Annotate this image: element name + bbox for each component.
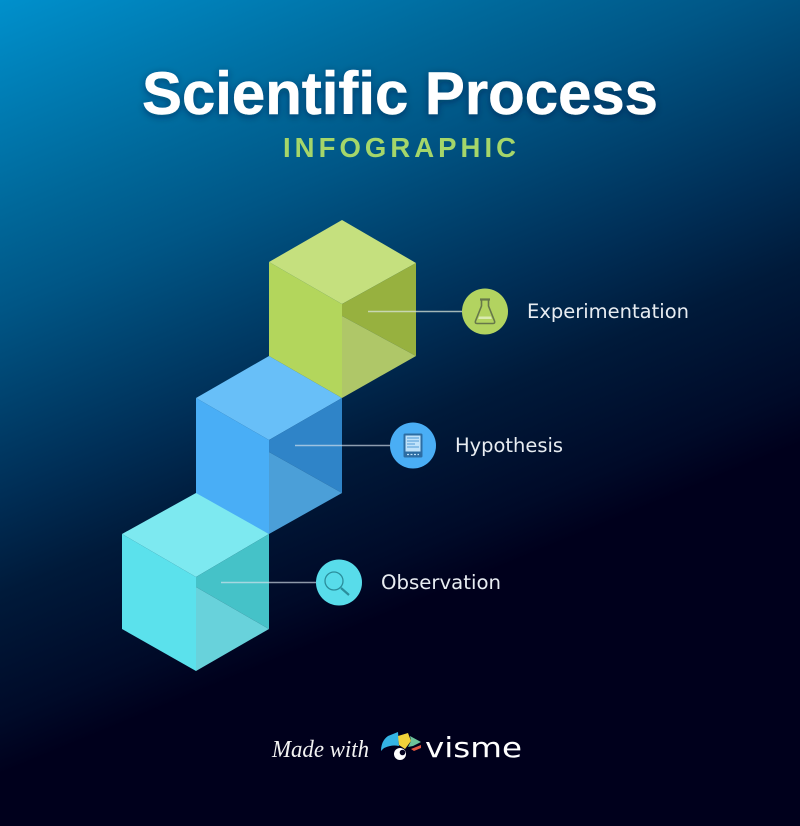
label: Hypothesis: Hypothesis — [455, 434, 563, 457]
connector: observation — [221, 582, 318, 584]
icon: flask — [462, 288, 508, 334]
visme wordmark: visme — [425, 731, 522, 764]
cube: hypothesis — [196, 356, 342, 534]
subtitle: INFOGRAPHIC — [283, 132, 516, 163]
connector: experimentation — [368, 310, 464, 312]
cube: observation — [122, 493, 269, 671]
made with: Made with — [271, 737, 369, 763]
title: Scientific Process — [142, 60, 658, 127]
icon: e-reader — [390, 422, 436, 468]
label: Observation: Observation — [381, 571, 501, 594]
label: Experimentation: Experimentation — [527, 300, 689, 323]
connector: hypothesis — [295, 444, 392, 446]
footer: made with visme — [271, 731, 522, 764]
cube stack — [122, 220, 416, 671]
icon: visme logo — [381, 732, 421, 760]
icon: magnifier — [316, 560, 362, 606]
cube: experimentation — [269, 220, 416, 398]
